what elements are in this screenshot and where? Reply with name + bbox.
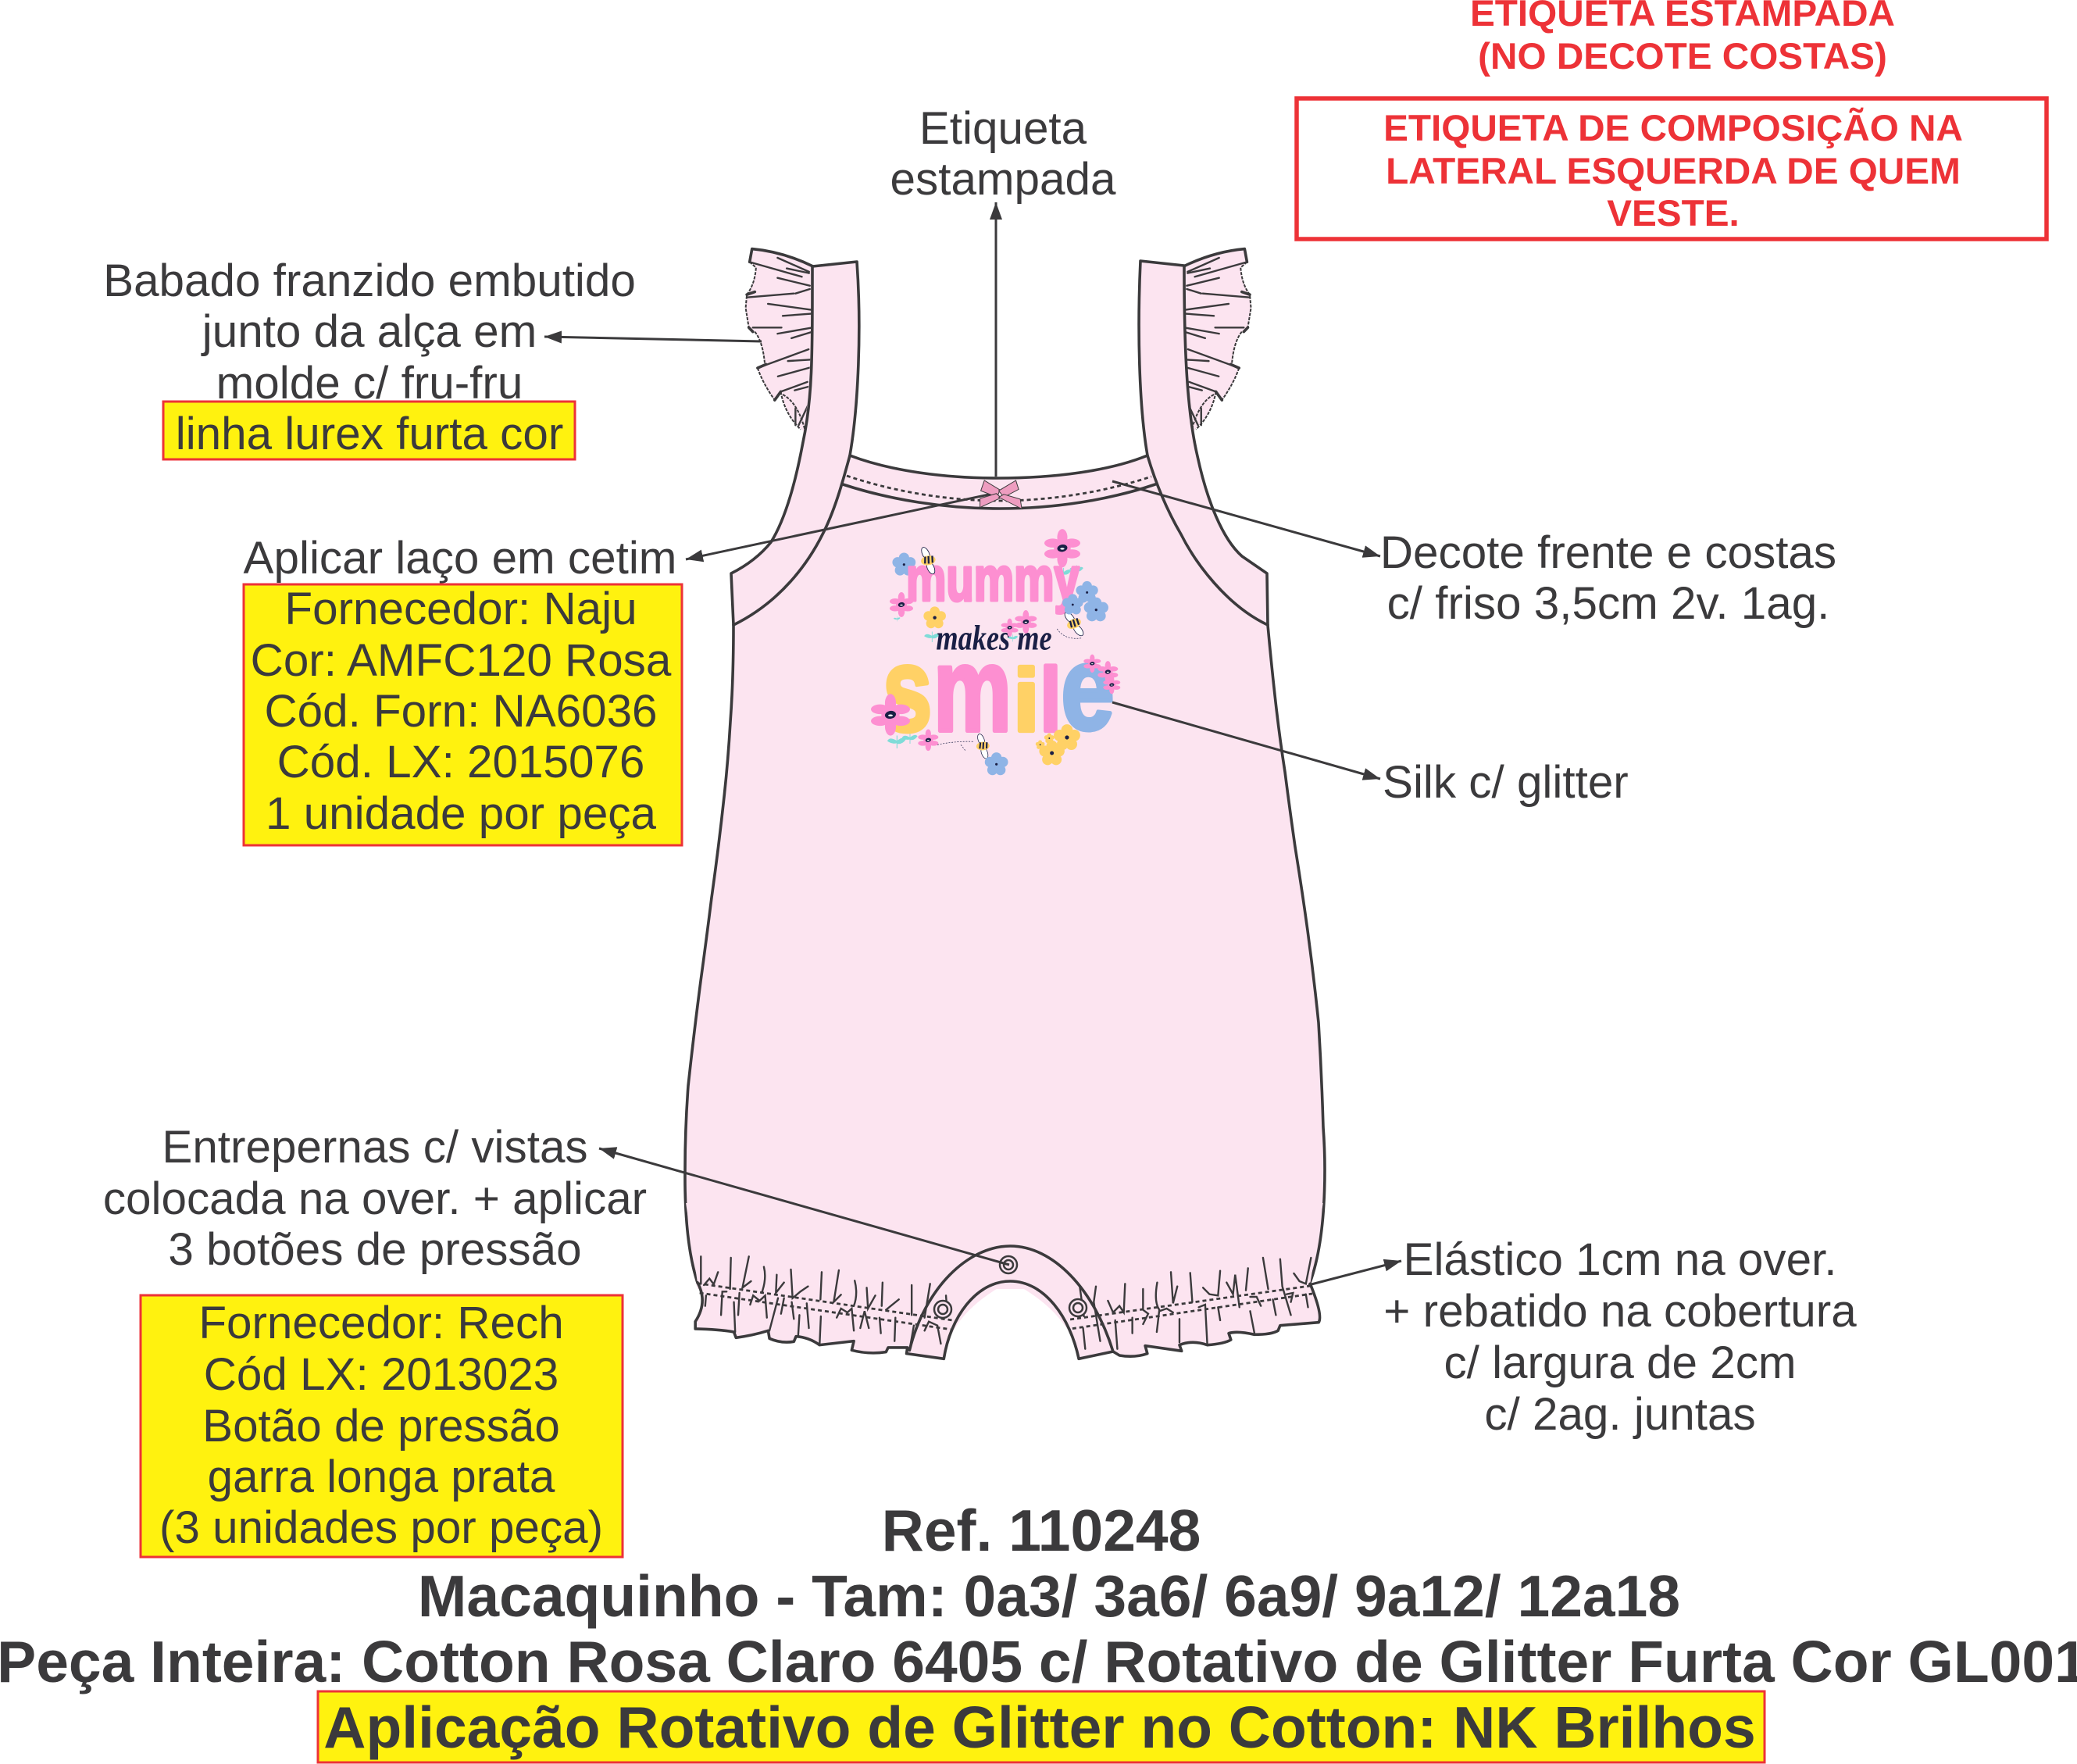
arrow: crotch [599,1148,1009,1265]
callout: button supplier (yellow): Fornecedor: Rech [198,1298,564,1348]
flowers and bees over lettering [871,545,1120,775]
label: elastic [1383,1234,1857,1440]
label: printed tag: Etiqueta [919,103,1087,154]
heading: fabric: Peça Inteira: Cotton Rosa Claro 6405 c/ Rotativo de Glitter Furta Cor GL001 [0,1629,2077,1694]
chest print: mummy makes me smile [871,529,1120,775]
label: elastic: c/ 2ag. juntas [1484,1389,1756,1440]
callout: button supplier (yellow): Botão de pressão [202,1401,560,1452]
leg hem with gathered ruffle and crotch placket [686,1203,1323,1359]
label: crotch [103,1122,647,1275]
callout: button supplier (yellow): Cód LX: 2013023 [204,1349,559,1400]
callout: button supplier (yellow) [141,1295,623,1557]
lettering: smile: s [883,623,932,756]
label: neckband: Decote frente e costas [1380,527,1836,578]
snap button: left [934,1301,951,1318]
heading: reference: Ref. 110248 [882,1498,1201,1563]
label: neckband [1380,527,1836,629]
heading: product and sizes: Macaquinho - Tam: 0a3/ 3a6/ 6a9/ 9a12/ 12a18 [418,1563,1680,1629]
lettering: makes me: makes me [936,619,1052,658]
callout: bow supplier (yellow): Cor: AMFC120 Rosa [251,635,672,686]
ruffle gather lines [701,1256,1311,1350]
lettering: smile: i [1013,651,1040,750]
romper body fill [685,261,1325,1289]
right ruffle sleeve [1184,249,1251,434]
label: elastic: Elástico 1cm na over. [1404,1234,1836,1285]
snap button: top centre [1000,1256,1017,1273]
label: neckband: c/ friso 3,5cm 2v. 1ag. [1387,578,1829,629]
callout: bow supplier (yellow): Cód. Forn: NA6036 [264,686,658,737]
arrow: neckband [1112,481,1380,556]
left ruffle sleeve [746,249,812,434]
label: crotch: colocada na over. + aplicar [103,1173,647,1224]
callout: composition label (red box): LATERAL ESQUERDA DE QUEM [1386,151,1961,192]
label: satin bow: Aplicar laço em cetim [244,533,676,584]
callout: bow supplier (yellow): Fornecedor: Naju [284,584,637,634]
lettering: smile: l [1040,650,1061,750]
garment outlines [685,261,1325,1283]
icon: satin bow [980,480,1022,509]
callout: composition label (red box): ETIQUETA DE COMPOSIÇÃO NA [1383,106,1963,149]
label: printed tag [890,103,1116,205]
arrow: elastic [1308,1261,1401,1285]
snap button: right [1069,1299,1087,1316]
arrow: printed label [995,202,997,477]
label: crotch: Entrepernas c/ vistas [162,1122,588,1173]
label: ruffle [103,255,636,409]
label: printed tag: estampada [890,154,1116,205]
lettering: smile: e [1061,621,1115,755]
callout: button supplier (yellow): garra longa prata [208,1452,555,1502]
lettering: smile: m [933,623,1012,756]
garment: pink romper technical drawing [685,249,1325,1359]
label: ruffle: junto da alça em [201,306,537,357]
label: ruffle: Babado franzido embutido [103,255,636,306]
lettering: smile [883,621,1115,756]
callout: composition label (red box) [1297,98,2047,239]
callout: bow supplier (yellow) [244,584,682,845]
callout: lurex thread (yellow): linha lurex furta cor [176,409,563,459]
callout: bow supplier (yellow): Cód. LX: 2015076 [277,737,644,787]
callout: bow supplier (yellow): 1 unidade por peça [266,788,657,839]
label: crotch: 3 botões de pressão [168,1224,582,1275]
arrow: satin bow [686,493,996,559]
label: elastic: c/ largura de 2cm [1444,1337,1797,1388]
label: ruffle: molde c/ fru-fru [216,358,523,409]
arrow: ruffle [544,337,762,341]
label: silk print: Silk c/ glitter [1383,757,1629,808]
lettering: mummy: mummy [906,544,1080,613]
callout: button supplier (yellow): (3 unidades por peça) [159,1502,603,1553]
callout: composition label (red box): VESTE. [1607,193,1740,234]
flowers behind lettering [888,529,1083,748]
arrow: silk print [1112,702,1380,779]
label: elastic: + rebatido na cobertura [1383,1286,1857,1337]
title note: printed label, back neckline: (NO DECOTE COSTAS) [1478,36,1887,77]
callout: glitter application (yellow): Aplicação Rotativo de Glitter no Cotton: NK Brilhos [323,1694,1756,1760]
title note: printed label, back neckline [1470,0,1895,77]
